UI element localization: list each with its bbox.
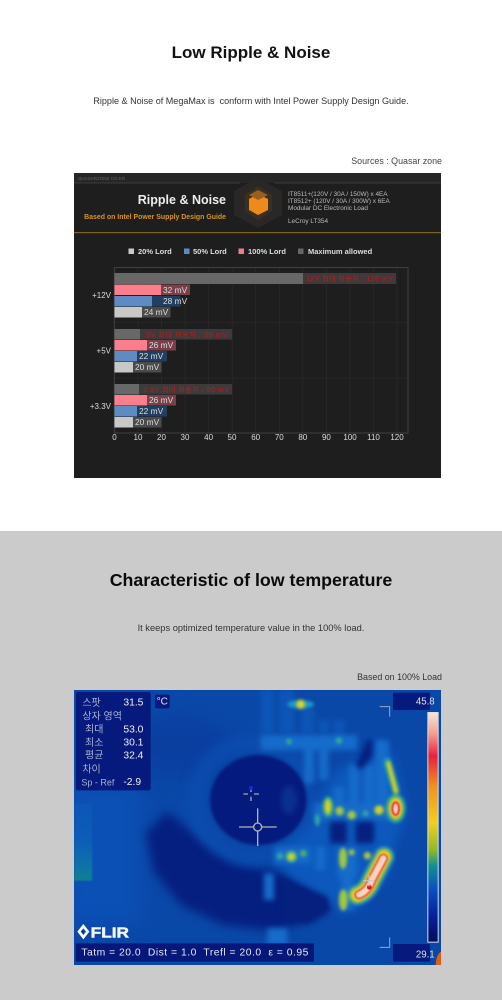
equipment specification: IT8512+ (120V / 30A / 300W) x 6EA bbox=[288, 198, 391, 205]
x axis labels: 50 bbox=[228, 433, 237, 442]
x axis labels: 0 bbox=[112, 433, 117, 442]
measurement readout: 스팟 bbox=[82, 697, 101, 709]
icon: orange hexagon bbox=[234, 178, 282, 228]
dark hub bbox=[210, 755, 307, 845]
unit badge bbox=[155, 695, 170, 708]
+3.3V group bbox=[90, 384, 232, 428]
+3.3V group: 26 mV bbox=[149, 395, 174, 405]
panel heading bbox=[84, 193, 226, 221]
equipment specification: IT8511+(120V / 30A / 150W) x 4EA bbox=[288, 191, 388, 198]
hot spots bbox=[277, 700, 406, 911]
panel: ripple and noise chart: QUASARZONE CO.KR bbox=[78, 176, 126, 181]
bar chart bbox=[90, 267, 408, 442]
environment parameters: Tatm = 20.0 Dist = 1.0 Trefl = 20.0 ε = 0.95 bbox=[81, 947, 309, 958]
measurement box corners bbox=[380, 707, 390, 947]
x axis labels: 10 bbox=[134, 433, 143, 442]
temperature scale bbox=[393, 693, 441, 965]
FLIR logo bbox=[77, 924, 129, 941]
+5V group: +5V bbox=[97, 346, 112, 356]
measurement readout: 최소 bbox=[85, 737, 103, 749]
lobes and streaks bbox=[261, 690, 344, 740]
temperature description: It keeps optimized temperature value in the 100% load. bbox=[138, 623, 364, 633]
equipment specification: LeCroy LT354 bbox=[288, 218, 328, 225]
x axis labels bbox=[112, 433, 404, 442]
measurement readout: 최대 bbox=[85, 723, 103, 735]
legend bbox=[128, 247, 373, 256]
panel heading: Based on Intel Power Supply Design Guide bbox=[84, 214, 226, 221]
measurement readout: 53.0 bbox=[123, 724, 144, 735]
x axis labels: 60 bbox=[251, 433, 261, 442]
equipment specification: Modular DC Electronic Load bbox=[288, 205, 368, 212]
+5V group: 20 mV bbox=[135, 362, 160, 372]
x axis labels: 30 bbox=[181, 433, 190, 442]
+12V group bbox=[92, 273, 396, 318]
legend: Maximum allowed bbox=[308, 247, 373, 256]
x axis labels: 80 bbox=[298, 433, 308, 442]
measurement readout: 32.4 bbox=[123, 751, 144, 762]
measurement readout: 상자 영역 bbox=[82, 710, 122, 722]
+12V group: 24 mV bbox=[144, 307, 169, 317]
title: low ripple and noise: Low Ripple & Noise bbox=[172, 43, 330, 62]
+3.3V group: 3.3V 최대 허용치 : 50 mV bbox=[143, 385, 229, 394]
temperature scale: 29.1 bbox=[416, 949, 435, 960]
measurement readout: 차이 bbox=[82, 763, 101, 775]
crosshair: center bbox=[239, 808, 277, 846]
+5V group: 5V 최대 허용치 : 50 mV bbox=[146, 330, 227, 339]
crosshair: spot bbox=[243, 786, 259, 801]
thermal heat map bbox=[64, 690, 407, 945]
measurement readout: 30.1 bbox=[123, 738, 144, 749]
ripple description: Ripple & Noise of MegaMax is conform with Intel Power Supply Design Guide. bbox=[93, 96, 409, 106]
x axis labels: 90 bbox=[322, 433, 331, 442]
panel heading: Ripple & Noise bbox=[138, 193, 226, 207]
measurement readout: -2.9 bbox=[123, 777, 141, 788]
+12V group: 28 mV bbox=[163, 296, 188, 306]
legend: 20% Lord bbox=[138, 247, 172, 256]
load note: Based on 100% Load bbox=[357, 672, 442, 682]
panel: ripple and noise chart bbox=[74, 173, 441, 478]
equipment specification bbox=[288, 191, 391, 225]
+3.3V group: +3.3V bbox=[90, 402, 112, 411]
x axis labels: 20 bbox=[157, 433, 166, 442]
+3.3V group: 22 mV bbox=[139, 406, 164, 416]
+12V group: +12V bbox=[92, 291, 112, 300]
+12V group: 12V 최대 허용치 : 120 mV bbox=[306, 274, 393, 283]
+5V group: 22 mV bbox=[139, 351, 164, 361]
title: low temperature: Characteristic of low temperature bbox=[110, 570, 392, 590]
FLIR logo: FLIR bbox=[91, 925, 129, 941]
x axis labels: 110 bbox=[367, 433, 380, 442]
lower section background bbox=[0, 531, 502, 1000]
x axis labels: 100 bbox=[343, 433, 357, 442]
+5V group bbox=[97, 329, 232, 372]
+12V group: 32 mV bbox=[163, 285, 188, 295]
legend: 50% Lord bbox=[193, 247, 227, 256]
legend: 100% Lord bbox=[248, 247, 286, 256]
thermal image bbox=[74, 690, 441, 965]
measurement readout: 평균 bbox=[85, 750, 103, 762]
x axis labels: 40 bbox=[204, 433, 214, 442]
measurement readout: Sp - Ref bbox=[81, 777, 115, 787]
+5V group: 26 mV bbox=[149, 340, 174, 350]
temperature scale: 45.8 bbox=[416, 697, 435, 708]
+3.3V group: 20 mV bbox=[135, 417, 160, 427]
measurement readout bbox=[76, 692, 151, 790]
unit badge: °C bbox=[157, 697, 168, 708]
x axis labels: 70 bbox=[275, 433, 284, 442]
sources note: Sources : Quasar zone bbox=[351, 156, 442, 166]
x axis labels: 120 bbox=[390, 433, 404, 442]
environment parameters bbox=[76, 943, 314, 962]
measurement readout: 31.5 bbox=[123, 698, 144, 709]
